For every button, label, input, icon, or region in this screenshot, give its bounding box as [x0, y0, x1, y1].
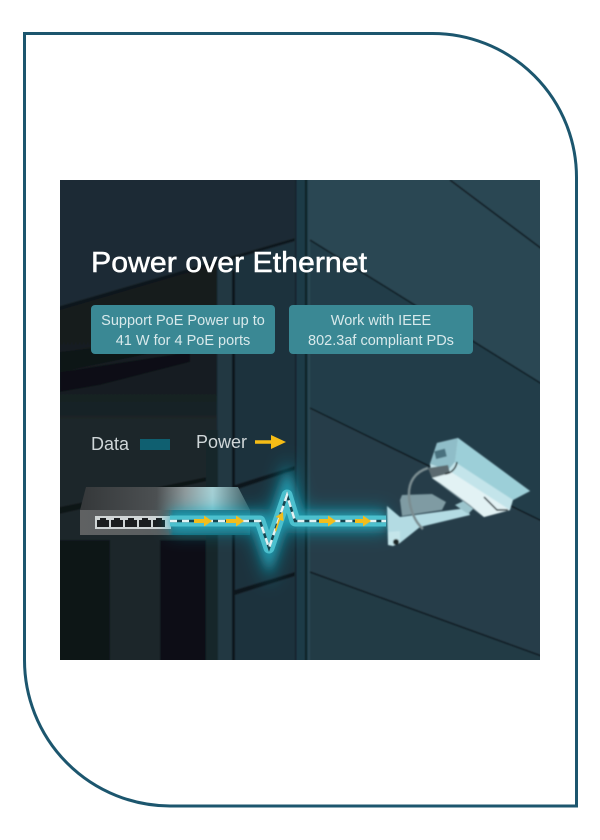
legend: power — [196, 432, 286, 452]
legend: data: Data — [91, 434, 130, 454]
conduit cable — [409, 468, 428, 529]
callout: PoE power: Support PoE Power up to — [101, 313, 265, 329]
corner pillar — [297, 180, 309, 660]
security camera — [387, 438, 530, 546]
cable band — [170, 495, 386, 548]
callout: IEEE standard: 802.3af compliant PDs — [308, 333, 454, 349]
title: Power over Ethernet — [91, 247, 367, 279]
legend: power: Power — [196, 432, 247, 452]
legend: data — [91, 434, 170, 454]
data and power cable line — [170, 495, 386, 548]
callout: PoE power — [91, 305, 275, 354]
callout: IEEE standard — [289, 305, 473, 354]
right wall panels — [308, 170, 550, 670]
photo panel: building wall background — [50, 170, 550, 670]
power arrows — [194, 512, 371, 532]
wall bracket — [387, 506, 470, 545]
switch ports — [95, 516, 171, 529]
camera housing — [430, 438, 530, 517]
network switch — [80, 487, 250, 535]
left dark wall — [50, 170, 300, 670]
cable glow — [170, 495, 386, 548]
callout: PoE power: 41 W for 4 PoE ports — [116, 333, 250, 349]
callout: IEEE standard: Work with IEEE — [331, 313, 432, 329]
cable dashes — [170, 495, 386, 548]
